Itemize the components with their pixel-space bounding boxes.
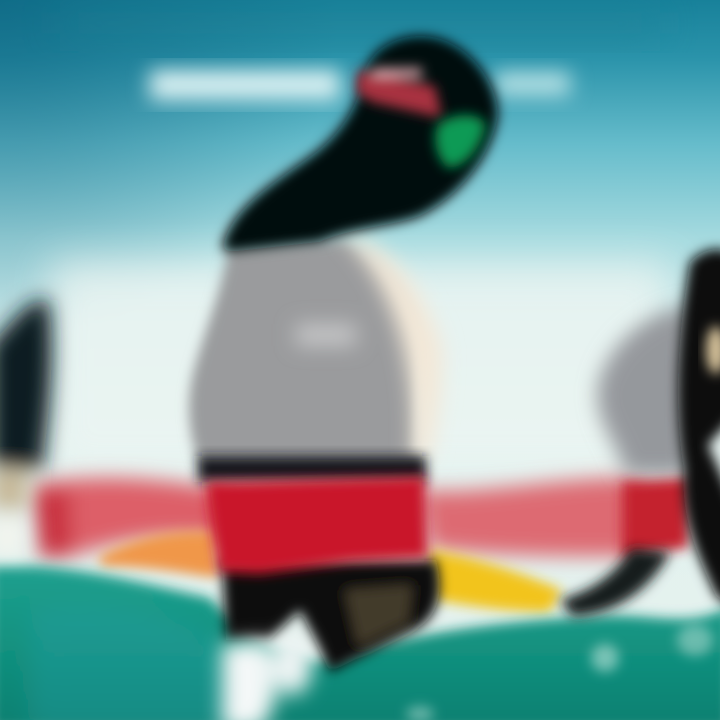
orange and yellow stripes <box>100 531 562 612</box>
main figure: red head band <box>356 68 442 118</box>
main figure: cream shoulder highlight <box>296 232 443 460</box>
main figure: white feet <box>222 635 312 720</box>
main figure: red shorts <box>205 476 428 574</box>
foreground white specks <box>406 624 713 720</box>
main figure: green accent <box>435 115 486 168</box>
red band across the scene <box>32 478 650 558</box>
title bar blur <box>150 70 570 100</box>
left background figure <box>0 299 52 556</box>
main figure: black upper body and head <box>222 36 498 252</box>
right background figure <box>560 249 720 616</box>
main figure <box>189 36 498 720</box>
main figure: gray torso <box>189 240 418 465</box>
main figure: dark waist band <box>198 456 426 482</box>
teal ground <box>0 565 720 720</box>
main figure: legs <box>222 560 440 672</box>
